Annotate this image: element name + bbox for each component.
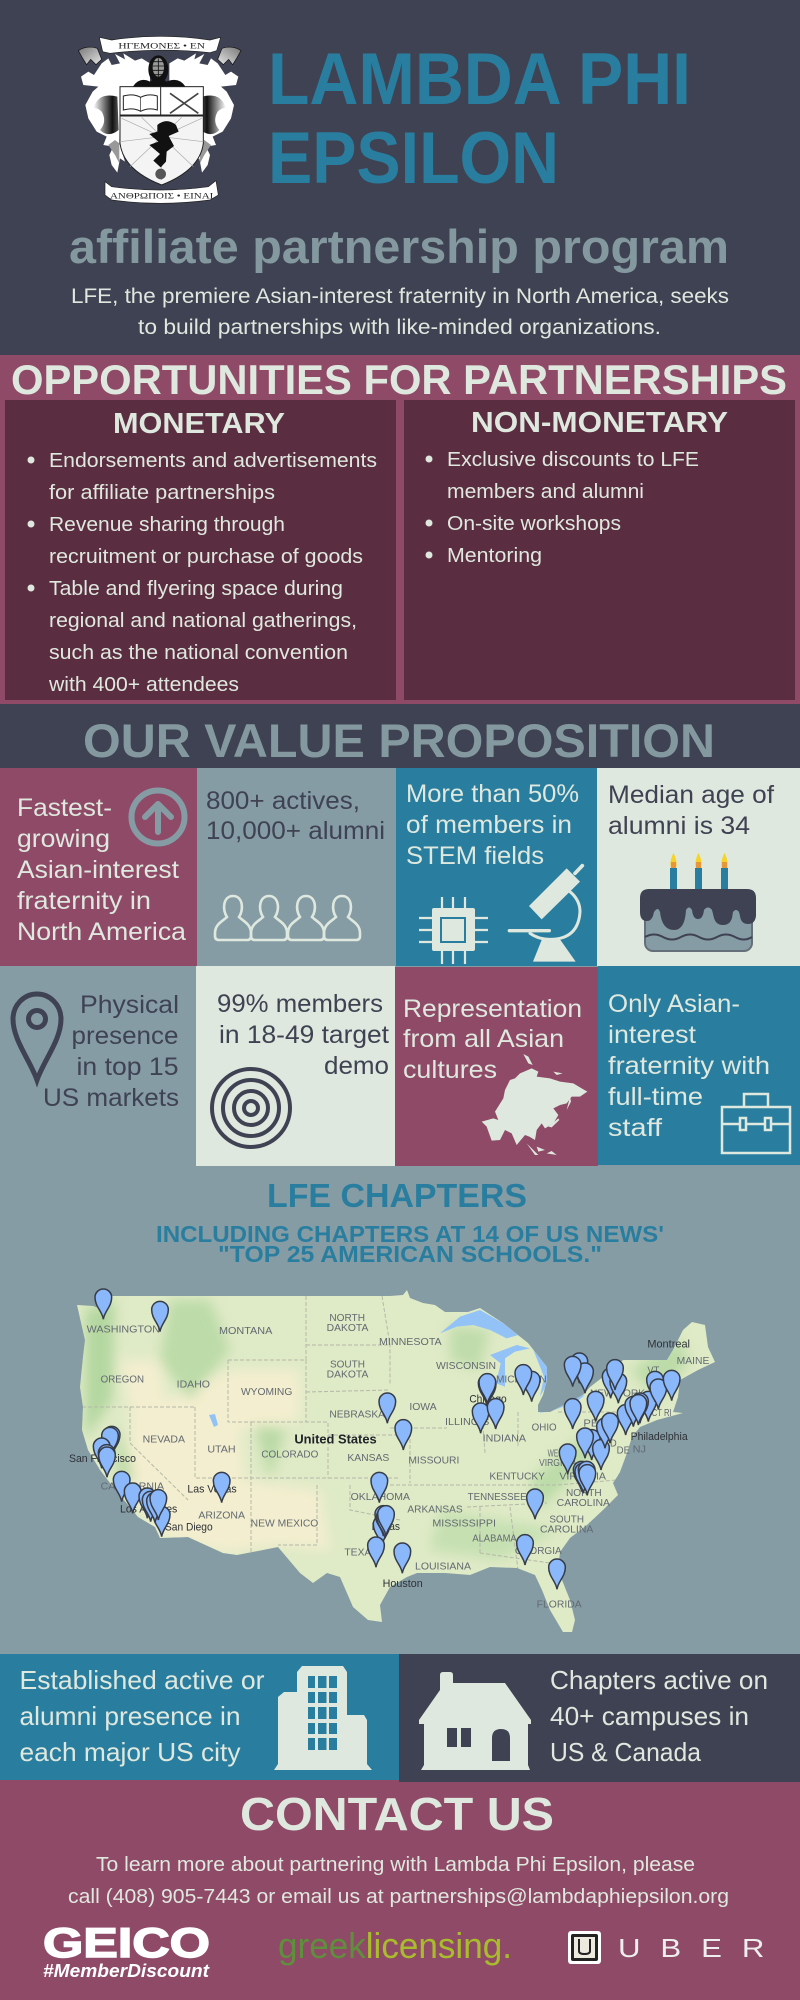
eastern labels and pins: MISSISSIPPI (432, 1519, 496, 1530)
text: 10,000+ alumni (206, 817, 385, 845)
eastern labels and pins: Philadelphia (631, 1431, 688, 1443)
western labels and pins: IDAHO (177, 1380, 210, 1391)
western labels and pins: TEXAS (344, 1548, 379, 1559)
logo: GEICO: GEICO (43, 1919, 210, 1966)
subheading (156, 1221, 664, 1267)
western labels and pins: OREGON (101, 1375, 144, 1386)
western labels and pins: Las Vegas (187, 1484, 237, 1496)
western labels and pins: WYOMING (241, 1387, 293, 1398)
title (268, 39, 691, 199)
western labels and pins: ARIZONA (198, 1510, 245, 1521)
eastern labels and pins: GEORGIA (515, 1546, 562, 1557)
logo: Uber: UBER (618, 1934, 764, 1963)
western labels and pins: UTAH (207, 1444, 236, 1455)
eastern labels and pins: MICHIGAN (496, 1375, 547, 1386)
bullet list: Exclusive discounts to LFE (447, 449, 699, 471)
eastern labels and pins: TENNESSEE (468, 1492, 527, 1503)
text: Fastest- (17, 794, 112, 822)
text: of members in (406, 811, 572, 839)
contact text: call (408) 905-7443 or email us at partnerships@lambdaphiepsilon.org (68, 1886, 729, 1908)
western labels and pins: CALIFORNIA (101, 1481, 164, 1492)
western labels and pins: NEW MEXICO (251, 1519, 319, 1530)
text: alumni is 34 (608, 812, 750, 840)
western labels and pins: NEBRASKA (329, 1410, 385, 1421)
text (17, 794, 186, 946)
text: in top 15 (76, 1053, 178, 1081)
eastern labels and pins: WISCONSIN (436, 1361, 496, 1372)
text: More than 50% (406, 780, 579, 808)
eastern labels and pins: SOUTH (549, 1515, 584, 1526)
eastern labels and pins: CT RI (652, 1408, 672, 1419)
text (403, 995, 582, 1084)
icon: Asia map (482, 1054, 587, 1155)
text (608, 781, 774, 840)
logo: greek licensing: greeklicensing. (278, 1925, 512, 1966)
western labels and pins: NORTH (329, 1313, 365, 1324)
western labels and pins: DAKOTA (327, 1323, 369, 1334)
eastern labels and pins: NEW YORK (590, 1389, 645, 1400)
text (608, 990, 770, 1142)
panel: major US city (0, 1654, 400, 1780)
eastern labels and pins: NORTH (566, 1488, 602, 1499)
text: US & Canada (550, 1737, 702, 1767)
eastern labels and pins: VIRGINIA (559, 1471, 606, 1482)
eastern labels and pins: Montreal (647, 1339, 690, 1351)
panel: header (0, 0, 800, 356)
text: Median age of (608, 781, 774, 809)
panel: value proposition heading band (0, 704, 800, 768)
icon: microscope (509, 866, 582, 962)
text: 800+ actives, (206, 787, 360, 815)
title: LAMBDA PHI (268, 39, 691, 120)
bullet list: recruitment or purchase of goods (49, 546, 363, 568)
subtitle: affiliate partnership program (69, 220, 729, 273)
eastern labels and pins: MISSOURI (408, 1455, 459, 1466)
tile: actives and alumni (197, 769, 396, 966)
bullet list: regional and national gatherings, (49, 610, 357, 632)
text: alumni presence in (20, 1701, 241, 1731)
text: growing (17, 825, 110, 853)
text: in 18-49 target (219, 1021, 389, 1049)
intro text (71, 284, 729, 339)
western labels and pins: WASHINGTON (87, 1325, 160, 1336)
eastern labels and pins: INDIANA (483, 1434, 526, 1445)
text: 99% members (217, 990, 383, 1018)
heading: non-monetary: NON-MONETARY (471, 407, 728, 439)
eastern labels and pins: WEST (548, 1449, 567, 1460)
text: staff (608, 1114, 662, 1142)
text: demo (324, 1052, 389, 1080)
bullet list (28, 450, 377, 696)
logo: Uber (568, 1931, 764, 1964)
text: Physical (80, 991, 179, 1019)
eastern labels and pins: CAROLINA (540, 1525, 594, 1536)
tile: target demo (196, 966, 395, 1166)
western labels and pins: DAKOTA (327, 1369, 369, 1380)
text (550, 1665, 768, 1767)
eastern labels and pins: PE (583, 1419, 599, 1430)
bullet list: Mentoring (447, 545, 542, 567)
text: STEM fields (406, 842, 544, 870)
icon: chip (419, 897, 488, 964)
text: each major US city (20, 1737, 241, 1767)
western labels and pins: San Francisco (69, 1453, 136, 1465)
subheading: "TOP 25 AMERICAN SCHOOLS." (218, 1241, 602, 1267)
tile: median age (597, 768, 800, 966)
heading: contact us: CONTACT US (240, 1788, 554, 1840)
text: fraternity with (608, 1052, 770, 1080)
intro text: to build partnerships with like-minded organizations. (138, 315, 661, 339)
logo: GEICO (43, 1919, 210, 1981)
bullet list: Table and flyering space during (49, 578, 343, 600)
eastern labels and pins: Chicago (469, 1394, 507, 1406)
eastern labels and pins: VT (647, 1365, 659, 1376)
icon: birthday cake (640, 853, 756, 951)
panel: contact (0, 1780, 800, 2000)
text: Asian-interest (17, 856, 179, 884)
western labels and pins: San Diego (165, 1522, 213, 1534)
text (406, 780, 579, 870)
icon: people (215, 896, 360, 940)
text: North America (17, 918, 186, 946)
text: Chapters active on (550, 1665, 768, 1695)
land (70, 1285, 730, 1635)
tile: STEM (396, 768, 597, 966)
heading: LFE chapters: LFE CHAPTERS (267, 1177, 527, 1214)
western labels and pins: United States (294, 1432, 377, 1446)
tile: fastest growing (0, 768, 197, 966)
icon: up arrow circle (132, 790, 184, 844)
text: fraternity in (17, 887, 151, 915)
eastern labels and pins: ARKANSAS (407, 1505, 463, 1516)
eastern labels and pins: D (610, 1439, 617, 1450)
icon: fraternity crest (78, 36, 241, 203)
text: interest (608, 1021, 696, 1049)
text (217, 990, 389, 1080)
bullet list: with 400+ attendees (48, 674, 239, 696)
bullet list (426, 449, 699, 567)
tile: Asian cultures (395, 967, 598, 1166)
heading: OUR VALUE PROPOSITION (83, 714, 715, 767)
contact text (68, 1854, 729, 1908)
eastern labels and pins: DE (617, 1445, 630, 1456)
western labels and pins: COLORADO (261, 1450, 319, 1461)
eastern labels and pins: MINNESOTA (379, 1337, 442, 1348)
text: Representation (403, 995, 582, 1023)
map of US chapters (69, 1285, 730, 1635)
western labels and pins: Dallas (372, 1521, 400, 1533)
western labels and pins (69, 1289, 410, 1567)
western labels and pins: NEVADA (143, 1435, 185, 1446)
title: EPSILON (268, 118, 559, 199)
subheading: INCLUDING CHAPTERS AT 14 OF US NEWS' (156, 1221, 664, 1247)
eastern labels and pins: IOWA (409, 1402, 437, 1413)
intro text: LFE, the premiere Asian-interest fraternity in North America, seeks (71, 284, 729, 308)
text (43, 991, 179, 1112)
western labels and pins: Los Angeles (120, 1504, 177, 1516)
eastern labels and pins: ILLINOIS (445, 1417, 490, 1428)
eastern labels and pins: FLORIDA (537, 1600, 582, 1611)
icon: house (419, 1672, 531, 1770)
bullet list: such as the national convention (49, 642, 348, 664)
heading: monetary: MONETARY (113, 408, 285, 440)
eastern labels and pins: CAROLINA (557, 1498, 610, 1509)
western labels and pins: OKLAHOMA (351, 1492, 410, 1503)
eastern labels and pins: VIRGINIA (539, 1458, 577, 1469)
text: Only Asian- (608, 990, 740, 1018)
eastern labels and pins: KENTUCKY (489, 1471, 545, 1482)
bullet list: Endorsements and advertisements (49, 450, 377, 472)
text: cultures (403, 1056, 497, 1084)
eastern labels and pins: NJ (633, 1444, 646, 1455)
panel: monetary (5, 400, 396, 700)
tile: physical presence (0, 966, 196, 1166)
bullet list: for affiliate partnerships (49, 482, 275, 504)
tile: full-time staff (598, 966, 800, 1165)
western labels and pins: MONTANA (219, 1326, 273, 1337)
text: US markets (43, 1084, 179, 1112)
panel: non-monetary (404, 400, 795, 700)
text: Established active or (20, 1665, 265, 1695)
logo: GEICO: #MemberDiscount (43, 1961, 210, 1981)
eastern labels and pins: Houston (383, 1578, 423, 1590)
icon: fraternity crest: ΗΓΕΜΟΝΕΣ • ΕΝ (118, 41, 205, 50)
bullet list: On-site workshops (447, 513, 621, 535)
text: full-time (608, 1083, 703, 1111)
text (206, 787, 385, 845)
bullet list: members and alumni (447, 481, 644, 503)
eastern labels and pins: ALABAMA (472, 1534, 517, 1545)
eastern labels and pins: OHIO (532, 1423, 557, 1434)
western labels and pins: KANSAS (347, 1453, 390, 1464)
icon: briefcase (722, 1094, 790, 1153)
panel: opportunities for partnerships (0, 355, 800, 704)
icon: building (274, 1666, 372, 1770)
text: 40+ campuses in (550, 1701, 749, 1731)
text: from all Asian (403, 1025, 564, 1053)
eastern labels and pins: LOUISIANA (415, 1561, 471, 1572)
western labels and pins: SOUTH (330, 1359, 365, 1370)
heading: OPPORTUNITIES FOR PARTNERSHIPS (11, 356, 787, 403)
contact text: To learn more about partnering with Lambda Phi Epsilon, please (96, 1854, 695, 1876)
icon: target (212, 1069, 290, 1147)
icon: location pin (13, 994, 61, 1080)
text (20, 1665, 265, 1767)
icon: fraternity crest: ΑΝΘΡΩΠΟΙΣ • ΕΙΝΑΙ (110, 191, 214, 200)
eastern labels and pins (379, 1337, 710, 1611)
lakes (440, 1310, 585, 1413)
eastern labels and pins: MAINE (677, 1356, 710, 1367)
bullet list: Revenue sharing through (49, 514, 285, 536)
panel: campuses (399, 1654, 800, 1782)
text: presence (72, 1022, 178, 1050)
